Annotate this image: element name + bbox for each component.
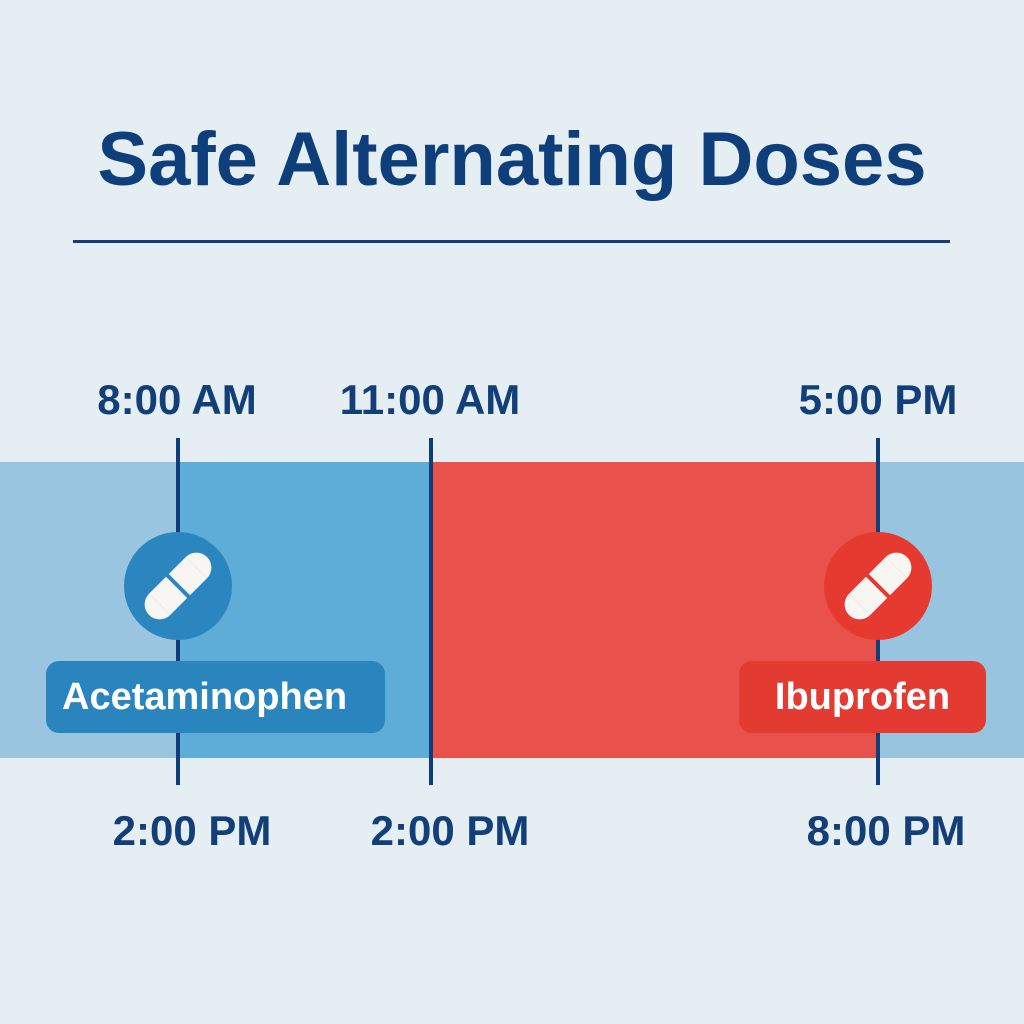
segment: light blue right bbox=[878, 462, 1024, 758]
title: Safe Alternating Doses bbox=[97, 117, 927, 202]
label: Ibuprofen bbox=[739, 661, 986, 733]
top time labels bbox=[97, 376, 957, 423]
bottom time labels: 2:00 PM bbox=[371, 807, 529, 854]
segment: light blue left bbox=[0, 462, 178, 758]
top time labels: 11:00 AM bbox=[340, 376, 520, 423]
top time labels: 8:00 AM bbox=[97, 376, 257, 423]
bottom time labels: 8:00 PM bbox=[807, 807, 965, 854]
label: Acetaminophen: Acetaminophen bbox=[62, 676, 347, 718]
label: Acetaminophen bbox=[46, 661, 385, 733]
timeline band bbox=[0, 462, 1024, 758]
label: Ibuprofen: Ibuprofen bbox=[775, 676, 950, 718]
segment: acetaminophen period bbox=[178, 462, 431, 758]
bottom time labels bbox=[113, 807, 965, 854]
bottom time labels: 2:00 PM bbox=[113, 807, 271, 854]
top time labels: 5:00 PM bbox=[799, 376, 957, 423]
segment: ibuprofen period bbox=[431, 462, 878, 758]
icon: ibuprofen pill bbox=[824, 532, 932, 640]
icon: acetaminophen pill bbox=[124, 532, 232, 640]
